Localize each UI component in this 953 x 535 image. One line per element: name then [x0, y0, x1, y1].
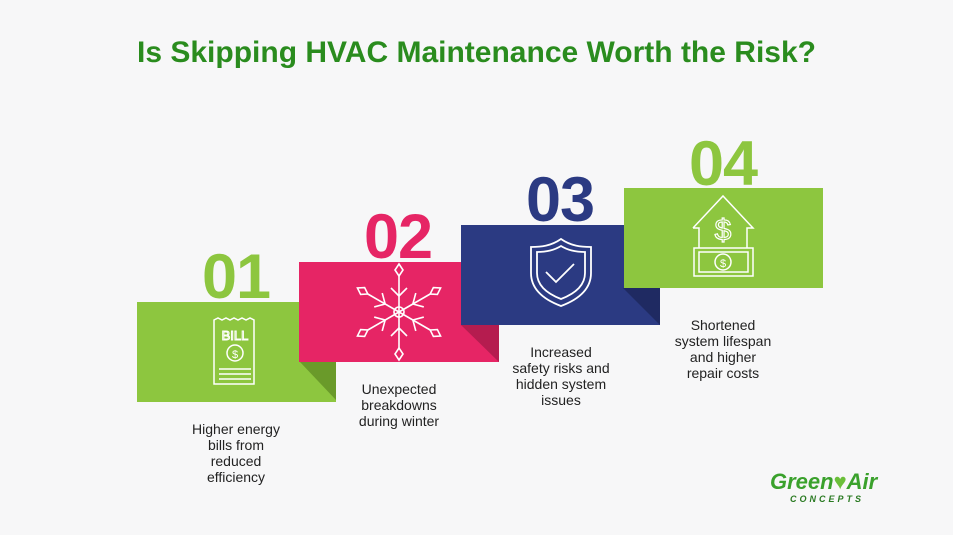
text 02: Unexpected breakdowns during winter	[359, 381, 439, 429]
step 2 box	[299, 262, 499, 362]
number 03: 03	[526, 165, 594, 235]
number 01: 01	[202, 242, 270, 312]
step 4 box	[624, 188, 823, 288]
icon: shield	[531, 239, 591, 306]
icon: bill	[214, 318, 254, 384]
icon: house with dollar: $	[720, 258, 726, 270]
number 02: 02	[364, 202, 432, 272]
text 03: Increased safety risks and hidden system issues	[512, 344, 610, 408]
text 01: Higher energy bills from reduced efficiency	[192, 421, 280, 485]
icon: bill: $	[232, 349, 238, 361]
step 1 box	[137, 302, 336, 402]
logo: CONCEPTS	[790, 494, 864, 504]
logo: Green♥Air	[770, 469, 877, 494]
icon: snowflake	[353, 264, 445, 360]
icon: bill: BILL	[222, 328, 248, 343]
icon: house with dollar	[693, 196, 753, 276]
number 04: 04	[689, 129, 757, 199]
icon: house with dollar: $	[715, 214, 732, 247]
text 04: Shortened system lifespan and higher repair costs	[675, 317, 771, 381]
step 3 box	[461, 225, 660, 325]
title: Is Skipping HVAC Maintenance Worth the Risk?	[137, 36, 816, 69]
